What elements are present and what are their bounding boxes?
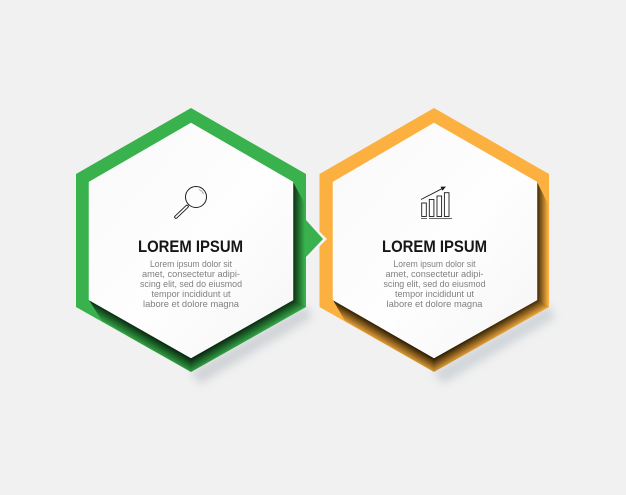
body text: first step: scing elit, sed do eiusmod (140, 279, 242, 290)
body text: second step: tempor incididunt ut (395, 289, 474, 300)
orange hexagon ring (320, 108, 549, 372)
panel: green hexagon step (76, 108, 312, 384)
body text: first step (140, 259, 242, 310)
heading: second step: LOREM IPSUM (382, 238, 487, 256)
outer shadow: orange hexagon (433, 305, 555, 384)
icon: growth bar chart (421, 186, 452, 218)
body text: second step: labore et dolore magna (386, 299, 483, 310)
body text: second step: scing elit, sed do eiusmod (384, 279, 486, 290)
icon: magnifying glass (176, 186, 206, 217)
body text: first step: labore et dolore magna (143, 299, 240, 310)
arrow: connector from green to orange (306, 218, 327, 260)
inner shadow on green ring (89, 182, 306, 372)
body text: first step: amet, consectetur adipi- (142, 269, 240, 280)
panel: orange hexagon step (320, 108, 555, 384)
body text: second step: Lorem ipsum dolor sit (394, 259, 476, 270)
body text: second step (384, 259, 486, 310)
white hexagon card (89, 123, 293, 358)
body text: second step: amet, consectetur adipi- (386, 269, 484, 280)
heading: first step: LOREM IPSUM (138, 238, 243, 256)
body text: first step: tempor incididunt ut (152, 289, 231, 300)
outer shadow: green hexagon (190, 305, 312, 384)
body text: first step: Lorem ipsum dolor sit (150, 259, 232, 270)
inner shadow on orange ring (333, 182, 549, 372)
white hexagon card (333, 123, 537, 358)
green hexagon ring (76, 108, 306, 372)
